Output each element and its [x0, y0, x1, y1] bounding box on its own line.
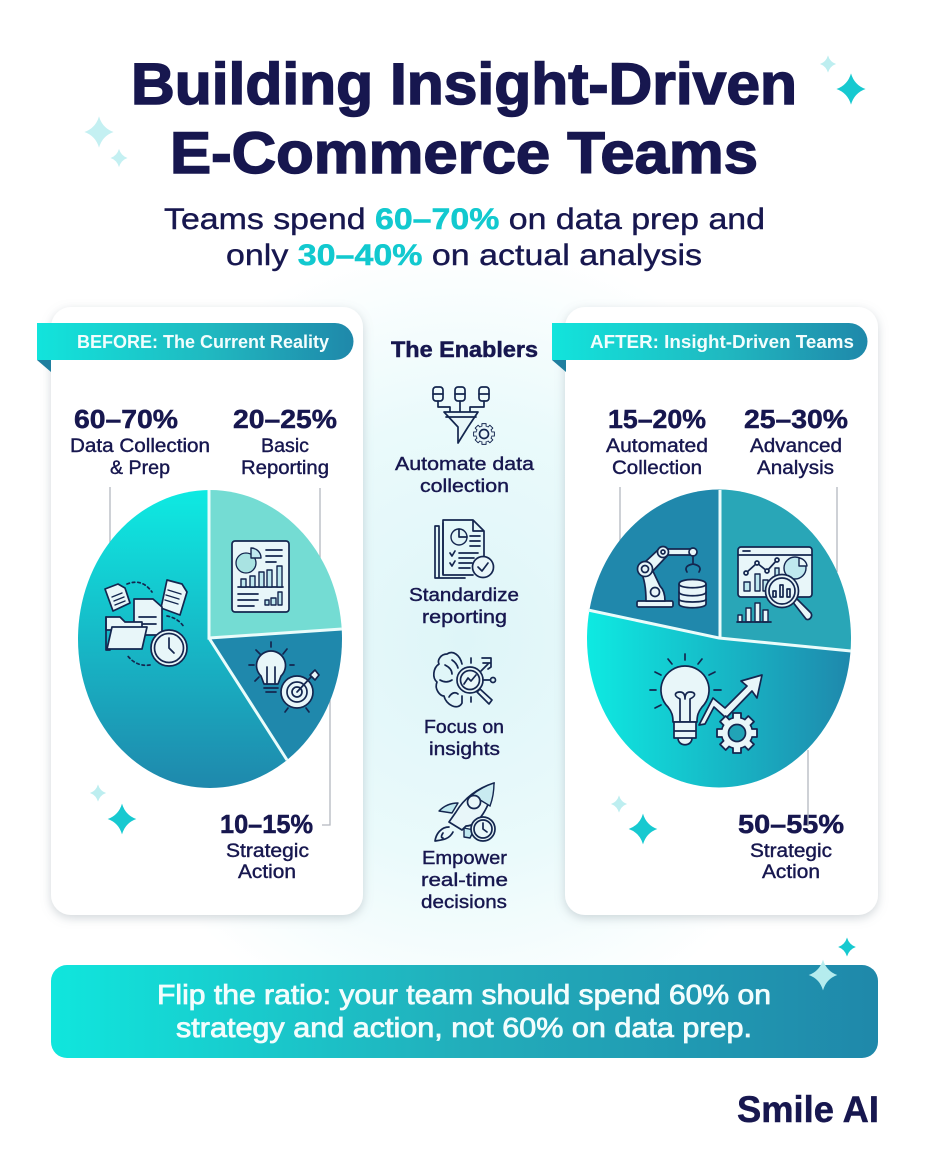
decorative sparkles: top	[84, 55, 866, 167]
enabler: focus on insights: insights	[429, 738, 500, 759]
subtitle: only 30–40% on actual analysis	[226, 239, 702, 272]
icon: rocket and clock	[435, 783, 495, 841]
subtitle	[164, 203, 765, 272]
heading: the enablers: The Enablers	[391, 337, 538, 362]
stat: automated collection: Collection	[612, 458, 702, 479]
brand: Smile AI	[737, 1089, 879, 1130]
icon: dashboard and magnifier	[737, 547, 812, 622]
sparkles: before panel	[90, 784, 136, 834]
callout banner: Flip the ratio: your team should spend 60% on	[157, 979, 771, 1010]
icon: funnel and gear	[433, 387, 494, 444]
enabler: automate data collection: collection	[420, 475, 509, 496]
stat: strategic action: 10–15%	[220, 809, 313, 839]
panel: before	[37, 307, 363, 915]
stat: automated collection: Automated	[606, 436, 708, 457]
ribbon: after heading: AFTER: Insight-Driven Teams	[590, 332, 854, 352]
enabler: automate data collection: Automate data	[395, 453, 535, 474]
enabler: standardize reporting: Standardize	[409, 584, 519, 605]
stat: advanced analysis: Advanced	[750, 436, 842, 457]
stat: basic reporting: Basic	[261, 436, 309, 457]
stat: automated collection	[606, 404, 708, 479]
subtitle: Teams spend 60–70% on data prep and	[164, 203, 765, 236]
stat: strategic action: 50–55%	[738, 809, 844, 839]
stat: strategic action	[220, 809, 313, 883]
stat: advanced analysis: 25–30%	[744, 404, 848, 434]
callout banner: strategy and action, not 60% on data prep.	[176, 1012, 752, 1043]
sparkles: after panel	[611, 795, 657, 844]
stat: basic reporting	[233, 404, 337, 479]
stat: advanced analysis	[744, 404, 848, 479]
stat: basic reporting: Reporting	[241, 458, 329, 479]
stat: data collection: & Prep	[110, 458, 170, 479]
ribbon: after heading	[552, 323, 868, 372]
stat: strategic action: Strategic	[750, 841, 832, 862]
enabler: automate data collection	[395, 387, 535, 496]
stat: data collection: Data Collection	[70, 436, 210, 457]
ribbon: before heading: BEFORE: The Current Reality	[77, 332, 329, 352]
icon: robot arm and database	[637, 546, 706, 608]
title: Building Insight-Driven	[131, 52, 797, 117]
stat: strategic action: Action	[238, 862, 296, 883]
stat: strategic action	[738, 809, 844, 883]
panel: after	[552, 307, 878, 915]
sparkles: banner	[809, 937, 856, 990]
pie chart: after	[587, 490, 851, 788]
enabler: empower real-time decisions	[421, 783, 508, 912]
callout banner	[51, 965, 878, 1058]
icon: files and clock	[105, 580, 187, 666]
enabler: focus on insights: Focus on	[424, 716, 504, 737]
title: E-Commerce Teams	[170, 121, 758, 186]
enabler: empower real-time decisions: decisions	[421, 891, 507, 912]
icon: brain and magnifier	[434, 653, 496, 707]
enabler: empower real-time decisions: Empower	[422, 847, 507, 868]
icon: report	[232, 541, 289, 612]
ribbon: before heading	[37, 323, 354, 372]
pie chart: before	[78, 490, 342, 788]
stat: automated collection: 15–20%	[608, 404, 706, 434]
icon: bulb and target	[249, 642, 319, 712]
enabler: empower real-time decisions: real-time	[421, 869, 508, 890]
enabler: standardize reporting	[409, 520, 519, 627]
enabler: standardize reporting: reporting	[422, 606, 507, 627]
icon: bulb, arrow and gear	[650, 654, 762, 753]
stat: strategic action: Action	[762, 862, 820, 883]
stat: data collection: 60–70%	[74, 404, 178, 434]
title	[131, 52, 797, 186]
stat: data collection	[70, 404, 210, 479]
icon: report stack	[435, 520, 494, 578]
stat: strategic action: Strategic	[226, 841, 309, 862]
stat: basic reporting: 20–25%	[233, 404, 337, 434]
stat: advanced analysis: Analysis	[757, 458, 834, 479]
panel: enablers	[391, 337, 538, 912]
enabler: focus on insights	[424, 653, 504, 759]
